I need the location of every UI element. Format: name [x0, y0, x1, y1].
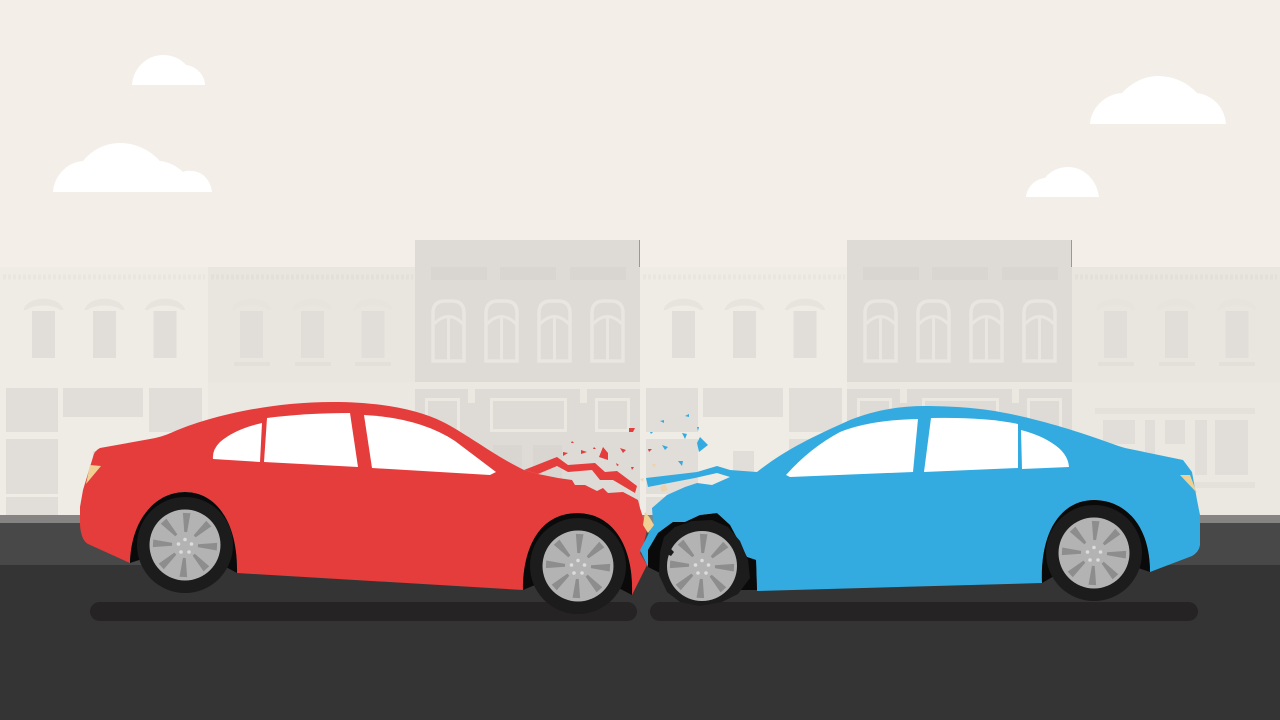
blue car crumpled hood strip	[646, 466, 757, 487]
blue car	[640, 406, 1200, 606]
blue car body	[640, 406, 1200, 591]
blue car tail light	[1180, 475, 1197, 493]
red car shadow	[90, 602, 637, 621]
red debris	[563, 428, 652, 470]
red car crumpled hood strip	[524, 457, 637, 493]
street buildings	[0, 240, 1280, 515]
blue car shadow	[650, 602, 1198, 621]
red car front wheel	[530, 518, 626, 614]
blue car damaged front wheel	[659, 520, 750, 606]
red car	[80, 402, 647, 614]
red car windows	[213, 413, 496, 475]
blue car windows	[786, 418, 1069, 477]
red car body	[80, 402, 647, 595]
blue debris	[650, 414, 708, 466]
red car wheel arches	[130, 492, 632, 595]
road	[0, 515, 1280, 720]
blue car wheel arches	[648, 500, 1150, 590]
blue car rear wheel	[1046, 505, 1142, 601]
red car rear wheel	[137, 497, 233, 593]
impact point: broken headlight shards	[643, 512, 654, 533]
red car tail light	[86, 465, 101, 484]
tan debris	[640, 464, 668, 492]
clouds	[53, 55, 1226, 197]
